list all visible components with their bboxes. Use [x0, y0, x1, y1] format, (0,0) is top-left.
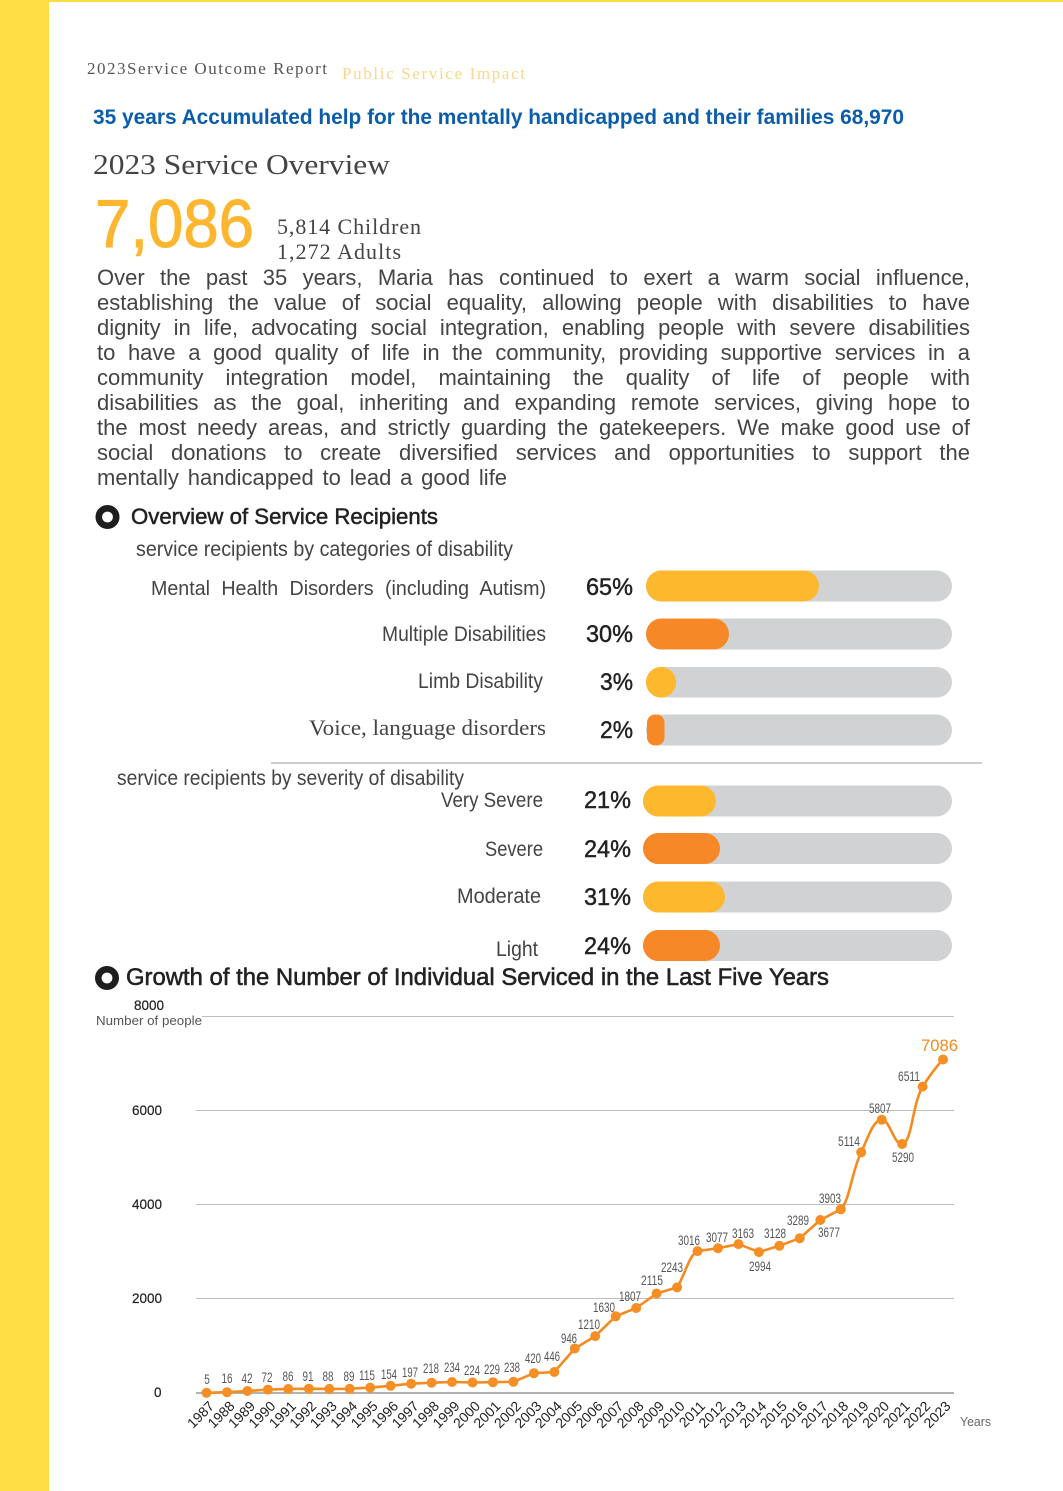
bar: limb disability: 3%: [600, 669, 633, 696]
subheading: severity: service recipients by severity of disability: [117, 767, 464, 790]
data value labels: [204, 1036, 958, 1387]
body paragraph: [97, 265, 970, 490]
data value labels: 72: [262, 1370, 272, 1385]
x axis year labels: 2008: [613, 1398, 647, 1431]
data value labels: 2243: [661, 1260, 683, 1275]
data value labels: 446: [544, 1349, 560, 1364]
body paragraph: dignity in life, advocating social integration, enabling people with severe disabilities: [97, 315, 970, 340]
body paragraph: community integration model, maintaining the quality of life of people with: [97, 365, 970, 390]
x axis year labels: 1998: [409, 1398, 442, 1431]
data value labels: 16: [222, 1371, 232, 1386]
body paragraph: the most needy areas, and strictly guarding the gatekeepers. We make good use of: [97, 415, 970, 440]
x axis year labels: 1995: [347, 1398, 381, 1431]
bar: light: [496, 930, 952, 961]
overview heading: 2023 Service Overview: [93, 149, 390, 181]
line chart: individuals served 1987 to 2023: [96, 998, 991, 1431]
data value labels: 1210: [578, 1317, 600, 1332]
data value labels: 234: [444, 1360, 460, 1375]
data value labels: 88: [322, 1369, 334, 1384]
bar chart: severity of disability: [441, 786, 952, 961]
x axis year labels: 2010: [654, 1398, 688, 1431]
data value labels: 1807: [619, 1289, 641, 1304]
data value labels: 42: [242, 1371, 252, 1386]
data value labels: 5: [204, 1372, 210, 1387]
x axis year labels: 2003: [511, 1398, 545, 1431]
x axis year labels: 1996: [368, 1398, 401, 1431]
data value labels: 3016: [678, 1233, 700, 1248]
x axis title: Years: [960, 1414, 991, 1429]
x axis year labels: [184, 1398, 954, 1431]
x axis year labels: 2013: [716, 1398, 749, 1431]
x axis year labels: 2021: [879, 1398, 913, 1431]
data value labels: 1630: [593, 1300, 615, 1315]
subheading: categories: service recipients by categories of disability: [136, 538, 513, 561]
bar: mental health: Mental Health Disorders (including Autism): [151, 578, 546, 600]
bar: very severe: 21%: [584, 787, 631, 814]
x axis year labels: 1989: [225, 1398, 258, 1431]
y axis labels: 0: [154, 1385, 162, 1400]
data value labels: 946: [561, 1331, 577, 1346]
data value labels: 3163: [732, 1226, 754, 1241]
bar: voice and language: [309, 714, 952, 746]
x axis year labels: 2009: [634, 1398, 667, 1431]
bar: voice and language: Voice, language disorders: [309, 715, 546, 740]
data points: [202, 1054, 948, 1398]
data value labels: 5114: [838, 1134, 860, 1149]
data value labels: 2115: [641, 1273, 663, 1288]
x axis year labels: 1993: [307, 1398, 340, 1431]
x axis year labels: 2005: [552, 1398, 586, 1431]
data value labels: 86: [282, 1369, 294, 1384]
x axis year labels: 2023: [920, 1398, 954, 1431]
data value labels: 3289: [787, 1213, 809, 1228]
data value labels: 6511: [898, 1069, 920, 1084]
bar: very severe: [441, 786, 952, 816]
data value labels: 115: [359, 1368, 375, 1383]
y axis labels: 2000: [132, 1291, 162, 1306]
bar: moderate: Moderate: [457, 885, 541, 908]
x axis year labels: 1990: [245, 1398, 279, 1431]
section tag: Public Service Impact: [342, 64, 525, 83]
data value labels: 89: [344, 1369, 354, 1384]
bar: moderate: 31%: [584, 884, 631, 911]
x axis year labels: 1999: [429, 1398, 463, 1431]
section heading: growth: Growth of the Number of Individual Serviced in the Last Five Years: [126, 964, 829, 991]
yellow top edge: [0, 0, 1063, 2]
x axis year labels: 1991: [266, 1398, 299, 1431]
data value labels: 218: [423, 1361, 439, 1376]
data value labels: 3128: [764, 1226, 786, 1241]
data value labels: 7086: [921, 1036, 958, 1055]
data value labels: 91: [302, 1369, 314, 1384]
x axis year labels: 2020: [859, 1398, 892, 1431]
children and adults counts: [277, 214, 421, 264]
bar: mental health: 65%: [586, 574, 633, 601]
x axis year labels: 2006: [572, 1398, 606, 1431]
x axis year labels: 2019: [838, 1398, 872, 1431]
x axis year labels: 2017: [798, 1398, 831, 1431]
report title: 2023Service Outcome Report: [87, 59, 327, 78]
data value labels: 3903: [819, 1191, 841, 1206]
data value labels: 2994: [749, 1259, 771, 1274]
body paragraph: establishing the value of social equality, allowing people with disabilities to have: [97, 290, 970, 315]
x axis year labels: 1992: [286, 1398, 320, 1431]
x axis year labels: 2018: [818, 1398, 852, 1431]
data value labels: 5290: [892, 1150, 914, 1165]
bar: mental health: [151, 570, 952, 602]
body paragraph: Over the past 35 years, Maria has continued to exert a warm social influence,: [97, 265, 970, 290]
y axis labels: 6000: [132, 1103, 162, 1118]
data value labels: 238: [504, 1360, 520, 1375]
big total number: 7,086: [95, 186, 254, 262]
bar: multiple disabilities: Multiple Disabilities: [382, 623, 546, 646]
data value labels: 3677: [818, 1225, 840, 1240]
body paragraph: social donations to create diversified services and opportunities to support the: [97, 440, 970, 465]
data value labels: 5807: [869, 1101, 891, 1116]
x axis year labels: 2007: [593, 1398, 626, 1431]
x axis year labels: 2011: [676, 1398, 708, 1430]
bar: severe: [485, 833, 952, 864]
bar chart: categories of disability: [151, 570, 952, 746]
data value labels: 224: [464, 1363, 480, 1378]
body paragraph: mentally handicapped to lead a good life: [97, 465, 507, 490]
x axis year labels: 2000: [450, 1398, 483, 1431]
x axis year labels: 1994: [327, 1398, 360, 1431]
bar: severe: 24%: [584, 836, 631, 863]
x axis year labels: 2002: [491, 1398, 524, 1431]
x axis year labels: 2015: [757, 1398, 790, 1431]
bar: voice and language: 2%: [600, 717, 633, 744]
x axis year labels: 1997: [388, 1398, 422, 1431]
blue headline: 35 years Accumulated help for the mentally handicapped and their families 68,970: [93, 105, 904, 129]
yellow side band: [0, 0, 49, 1491]
data value labels: 154: [381, 1367, 397, 1382]
data value labels: 197: [402, 1365, 418, 1380]
bar: moderate: [457, 882, 952, 912]
body paragraph: to have a good quality of life in the community, providing supportive services in a: [97, 340, 970, 365]
x axis year labels: 2004: [532, 1398, 565, 1431]
data value labels: 3077: [706, 1230, 728, 1245]
x axis year labels: 2022: [900, 1398, 933, 1431]
data value labels: 420: [525, 1351, 541, 1366]
y axis labels: [96, 998, 202, 1400]
bar: multiple disabilities: [382, 618, 952, 650]
section heading: overview of recipients: Overview of Service Recipients: [131, 504, 438, 529]
x axis year labels: 2016: [777, 1398, 811, 1431]
data line: [206, 1060, 943, 1393]
bar: limb disability: Limb Disability: [418, 670, 543, 693]
x axis year labels: 2012: [695, 1398, 729, 1431]
x axis year labels: 1988: [204, 1398, 238, 1431]
bar: light: Light: [496, 938, 538, 961]
y axis labels: Number of people: [96, 1013, 202, 1028]
y axis labels: 8000: [134, 998, 164, 1013]
bar: very severe: Very Severe: [441, 789, 543, 812]
bar: multiple disabilities: 30%: [586, 621, 633, 648]
x axis year labels: 2001: [470, 1398, 504, 1431]
y axis labels: 4000: [132, 1197, 162, 1212]
bar: severe: Severe: [485, 838, 543, 861]
data value labels: 229: [484, 1362, 500, 1377]
body paragraph: disabilities as the goal, inheriting and expanding remote services, giving hope to: [97, 390, 970, 415]
x axis year labels: 1987: [184, 1398, 217, 1431]
bar: light: 24%: [584, 933, 631, 960]
x axis year labels: 2014: [736, 1398, 770, 1431]
bar: limb disability: [418, 667, 952, 698]
children and adults counts: 5,814 Children: [277, 214, 421, 239]
children and adults counts: 1,272 Adults: [277, 239, 401, 264]
